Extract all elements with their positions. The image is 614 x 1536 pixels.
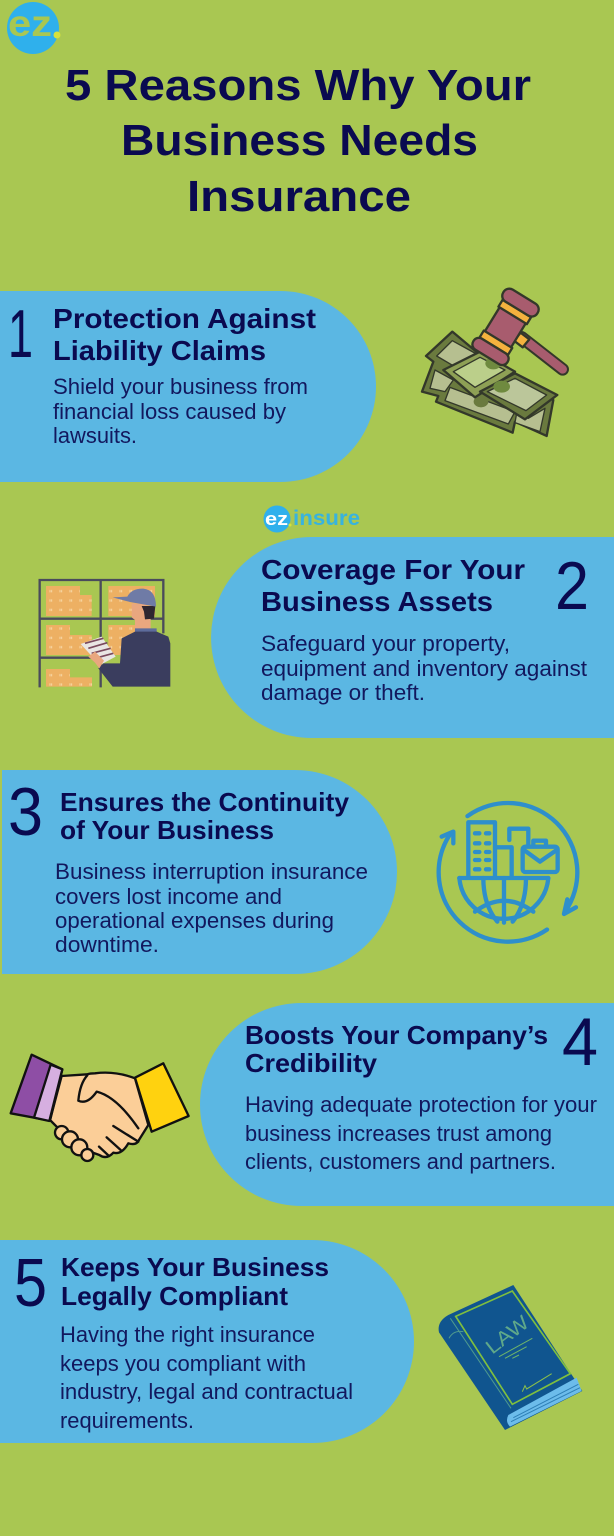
body text 1: Shield your business from [53,374,308,399]
number 5: 5 [14,1245,47,1321]
icon: gavel on money [422,286,563,436]
title: Business Needs [121,116,478,165]
logo: ez top left: ez [8,3,52,44]
body text 2 [261,631,587,705]
body text 3 [55,859,368,957]
heading 2 [261,554,525,617]
logo: ez insure: insure [293,507,360,530]
title: 5 Reasons Why Your [65,61,531,110]
heading 3: of Your Business [60,815,274,845]
body text 5 [60,1322,353,1433]
body text 5: requirements. [60,1408,194,1433]
heading 4: Boosts Your Company’s [245,1020,548,1050]
body text 1: lawsuits. [53,423,137,448]
body text 2: Safeguard your property, [261,631,510,656]
panel 4: credibility [200,1003,614,1206]
body text 3: operational expenses during [55,908,334,933]
number 1: 1 [8,296,33,372]
body text 5: industry, legal and contractual [60,1379,353,1404]
heading 5 [61,1252,329,1311]
title [65,61,531,221]
panel 1: liability claims [0,291,376,482]
icon: globe with buildings and arrows [439,803,577,942]
number 3: 3 [8,774,43,850]
heading 1 [53,303,316,366]
panel 3: business continuity [2,770,397,974]
heading 2: Business Assets [261,586,493,617]
heading 5: Legally Compliant [61,1281,288,1311]
body text 5: Having the right insurance [60,1322,315,1347]
heading 5: Keeps Your Business [61,1252,329,1282]
icon: warehouse worker with clipboard [40,580,170,687]
logo: ez insure: ez [265,509,288,529]
body text 1 [53,374,308,448]
heading 3 [60,787,350,845]
heading 3: Ensures the Continuity [60,787,350,817]
logo: ez insure [264,506,360,532]
body text 4: business increases trust among [245,1121,552,1146]
body text 2: damage or theft. [261,680,425,705]
number 4: 4 [562,1004,598,1080]
heading 4 [245,1020,548,1078]
heading 1: Protection Against [53,303,316,334]
panel 5: legal compliance [0,1240,414,1443]
body text 4 [245,1092,597,1174]
body text 3: Business interruption insurance [55,859,368,884]
body text 4: clients, customers and partners. [245,1149,556,1174]
icon: law book: LAW [482,1312,534,1359]
heading 4: Credibility [245,1048,378,1078]
title: Insurance [187,172,411,221]
number 2: 2 [555,548,589,624]
body text 5: keeps you compliant with [60,1351,306,1376]
heading 1: Liability Claims [53,335,266,366]
body text 1: financial loss caused by [53,399,286,424]
panel 2: business assets [211,537,614,738]
icon: handshake [11,1055,189,1161]
body text 4: Having adequate protection for your [245,1092,597,1117]
body text 2: equipment and inventory against [261,656,587,681]
body text 3: covers lost income and [55,884,282,909]
icon: law book [439,1285,582,1430]
body text 3: downtime. [55,932,159,957]
heading 2: Coverage For Your [261,554,525,585]
logo: ez top left [7,2,60,54]
